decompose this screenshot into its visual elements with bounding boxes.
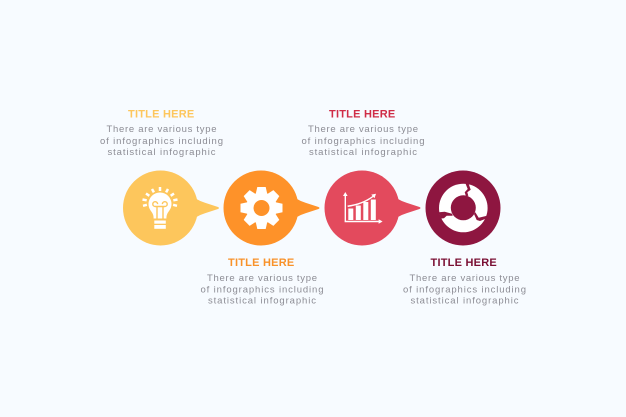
step 2 description: of infographics including: [200, 284, 324, 296]
step 3 text block: [302, 108, 424, 158]
icon: gear: [240, 187, 282, 229]
step 3 description: of infographics including: [302, 136, 424, 147]
step 1 description: of infographics including: [100, 136, 223, 147]
step 3 description: statistical infographic: [309, 147, 417, 158]
step 4 title: TITLE HERE: [430, 257, 498, 269]
step 3 red bubble with bar chart: [324, 170, 420, 246]
step 4 description: statistical infographic: [410, 296, 519, 306]
step 3 title: TITLE HERE: [329, 108, 396, 120]
step 4 text block: [403, 257, 526, 306]
step 2 text block: [200, 257, 324, 306]
step 4 description: of infographics including: [403, 284, 526, 296]
step 1 title: TITLE HERE: [128, 108, 195, 120]
step 2 title: TITLE HERE: [228, 257, 295, 269]
step 1 yellow bubble with bulb: [123, 170, 219, 246]
step 4 description: [403, 273, 526, 306]
step 3 description: There are various type: [308, 124, 418, 135]
step 4 dark bubble with cycle arrows: [426, 170, 500, 246]
icon: bar chart: [343, 192, 383, 224]
step 1 text block: [100, 108, 223, 158]
step 3 description: [302, 124, 424, 158]
step 1 description: There are various type: [106, 124, 216, 135]
icon: cycle arrows: [439, 183, 488, 232]
step 2 orange bubble with gear: [224, 170, 320, 246]
icon: light bulb: [142, 187, 178, 229]
step 1 description: statistical infographic: [108, 147, 216, 158]
step 2 description: [200, 273, 324, 306]
step 2 description: There are various type: [207, 273, 317, 284]
step 2 description: statistical infographic: [208, 296, 316, 306]
step 1 description: [100, 124, 223, 158]
step 4 description: There are various type: [410, 273, 520, 284]
